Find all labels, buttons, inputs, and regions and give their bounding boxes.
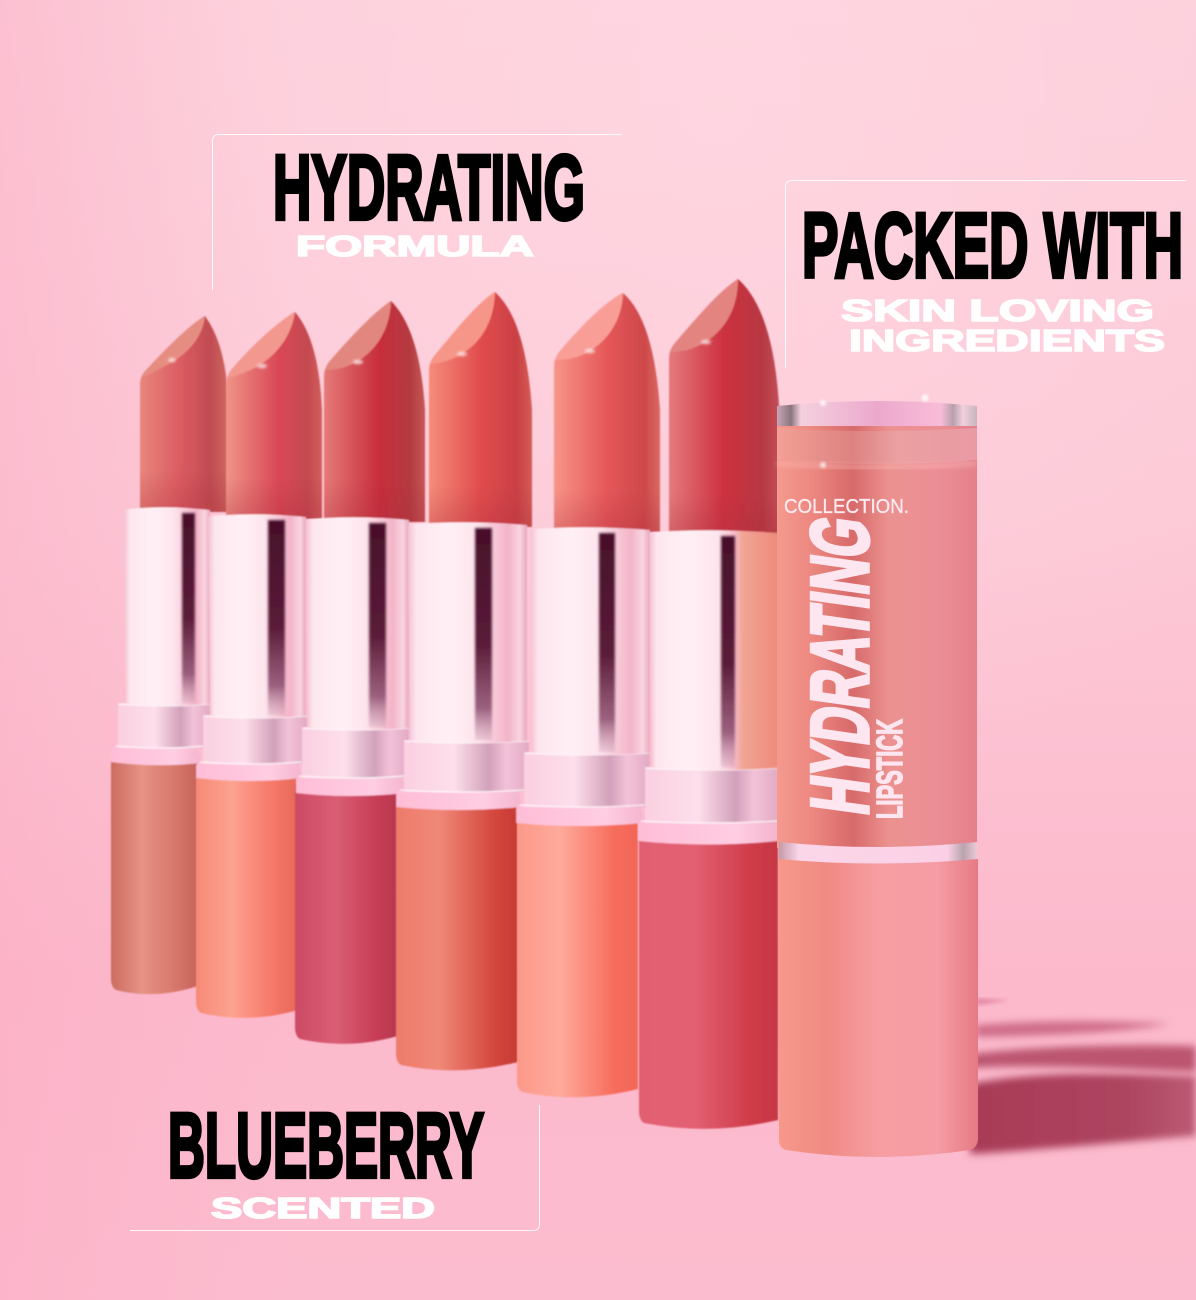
cap base (778, 859, 978, 1157)
collar and ring 1 (111, 703, 210, 765)
cap body (777, 426, 977, 848)
bullet 6 (669, 279, 779, 535)
collar and ring 2 (196, 715, 307, 781)
base 2 (196, 770, 298, 1018)
callout: hydrating formula (212, 134, 622, 290)
bullet 4 (429, 292, 532, 527)
product type: LIPSTICK (869, 719, 910, 819)
callout: packed with (786, 180, 1186, 368)
bullet 3 (324, 301, 425, 522)
heading: HYDRATING (273, 137, 585, 239)
silver tube 5 (530, 527, 650, 755)
lipstick 1 (111, 316, 228, 994)
silver tube 4 (408, 522, 527, 743)
lipstick 3 (295, 301, 425, 1044)
brand name: COLLECTION. (784, 496, 909, 518)
collar and ring 4 (396, 740, 529, 810)
sparkles on cap (820, 394, 928, 468)
product name: HYDRATING (794, 511, 886, 820)
bullet 1 (140, 316, 228, 512)
lipstick 6 (638, 279, 779, 1129)
bullet 2 (226, 312, 322, 519)
silver tube 6 (650, 530, 778, 770)
collar and ring 5 (516, 752, 650, 826)
capped lipstick (777, 394, 978, 1157)
lipstick 4 (396, 292, 532, 1070)
base 4 (396, 800, 518, 1070)
cast shadow on the floor (970, 998, 1196, 1154)
base 6 (639, 832, 778, 1129)
lipstick 5 (516, 293, 660, 1097)
clear cap top (777, 401, 977, 431)
collar and ring 6 (638, 767, 778, 844)
heading: BLUEBERRY (168, 1095, 484, 1197)
bullet 5 (554, 293, 660, 532)
silver tube 3 (306, 517, 409, 730)
collar and ring 3 (296, 727, 409, 796)
callout: packed with: INGREDIENTS (849, 323, 1165, 358)
silver tube 2 (208, 514, 306, 718)
subheading: SKIN LOVING (841, 293, 1154, 328)
base 1 (111, 756, 198, 994)
silver tube 1 (124, 507, 210, 706)
subheading: SCENTED (211, 1193, 435, 1225)
base 3 (295, 785, 398, 1044)
subheading: FORMULA (296, 231, 534, 263)
lipstick 2 (196, 312, 322, 1018)
base 5 (517, 815, 638, 1097)
cap silver ring (779, 842, 977, 864)
callout: blueberry scented (130, 1095, 540, 1230)
